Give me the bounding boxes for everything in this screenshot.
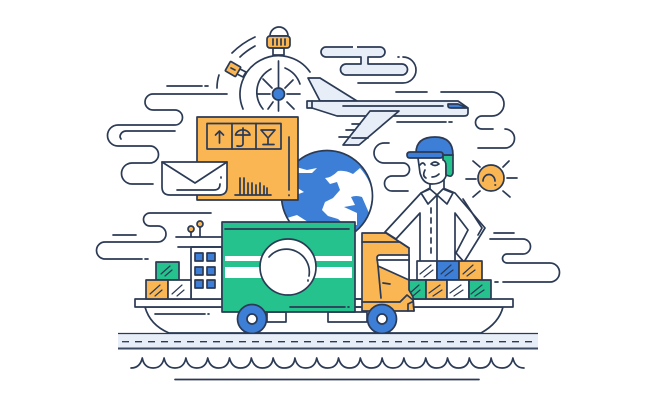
cap [416, 137, 453, 155]
truck front wheel [368, 304, 396, 334]
bridge windows [195, 253, 215, 288]
airplane cockpit window [448, 104, 467, 108]
right upper cloud lines [396, 92, 514, 148]
top cloud [321, 47, 416, 83]
collar [421, 189, 453, 204]
ship [135, 221, 513, 333]
envelope icon [162, 162, 227, 195]
right crates [408, 261, 491, 299]
cloud behind person [374, 143, 410, 191]
mini bars [235, 178, 271, 195]
person [385, 137, 485, 262]
stopwatch side button [225, 61, 246, 77]
baseline [175, 378, 479, 380]
road [118, 334, 538, 348]
truck chassis [267, 312, 367, 322]
box tape line [288, 137, 290, 196]
airplane fuselage [307, 101, 468, 116]
water waves [131, 358, 524, 368]
truck rail [355, 299, 362, 307]
motion arcs [217, 37, 255, 88]
lower right cloud line [490, 233, 560, 282]
truck rear wheel [238, 304, 266, 334]
left upper cloud line [108, 86, 227, 184]
ship bridge [176, 221, 222, 299]
globe [282, 150, 372, 242]
ship hull [145, 307, 503, 333]
ship deck [135, 299, 513, 307]
cab window [377, 255, 409, 280]
airplane wing [343, 111, 399, 145]
truck [222, 222, 414, 334]
airplane [307, 78, 468, 145]
left crates [146, 262, 191, 299]
cargo stripes [225, 256, 352, 278]
airplane tail [308, 78, 357, 101]
neck [430, 176, 444, 195]
shirt [385, 188, 485, 262]
stopwatch crown [267, 27, 290, 55]
handling symbols [207, 124, 281, 149]
stopwatch [217, 27, 310, 111]
continent [322, 168, 372, 225]
sun icon [466, 161, 517, 197]
hair [443, 155, 453, 176]
cardboard box [197, 117, 298, 200]
truck cab [362, 233, 414, 311]
cargo circle [260, 239, 316, 295]
face [418, 155, 446, 184]
truck cargo box [222, 222, 355, 312]
stopwatch dial arcs [240, 56, 310, 111]
stopwatch centre [272, 88, 284, 100]
lower left cloud line [96, 213, 211, 259]
